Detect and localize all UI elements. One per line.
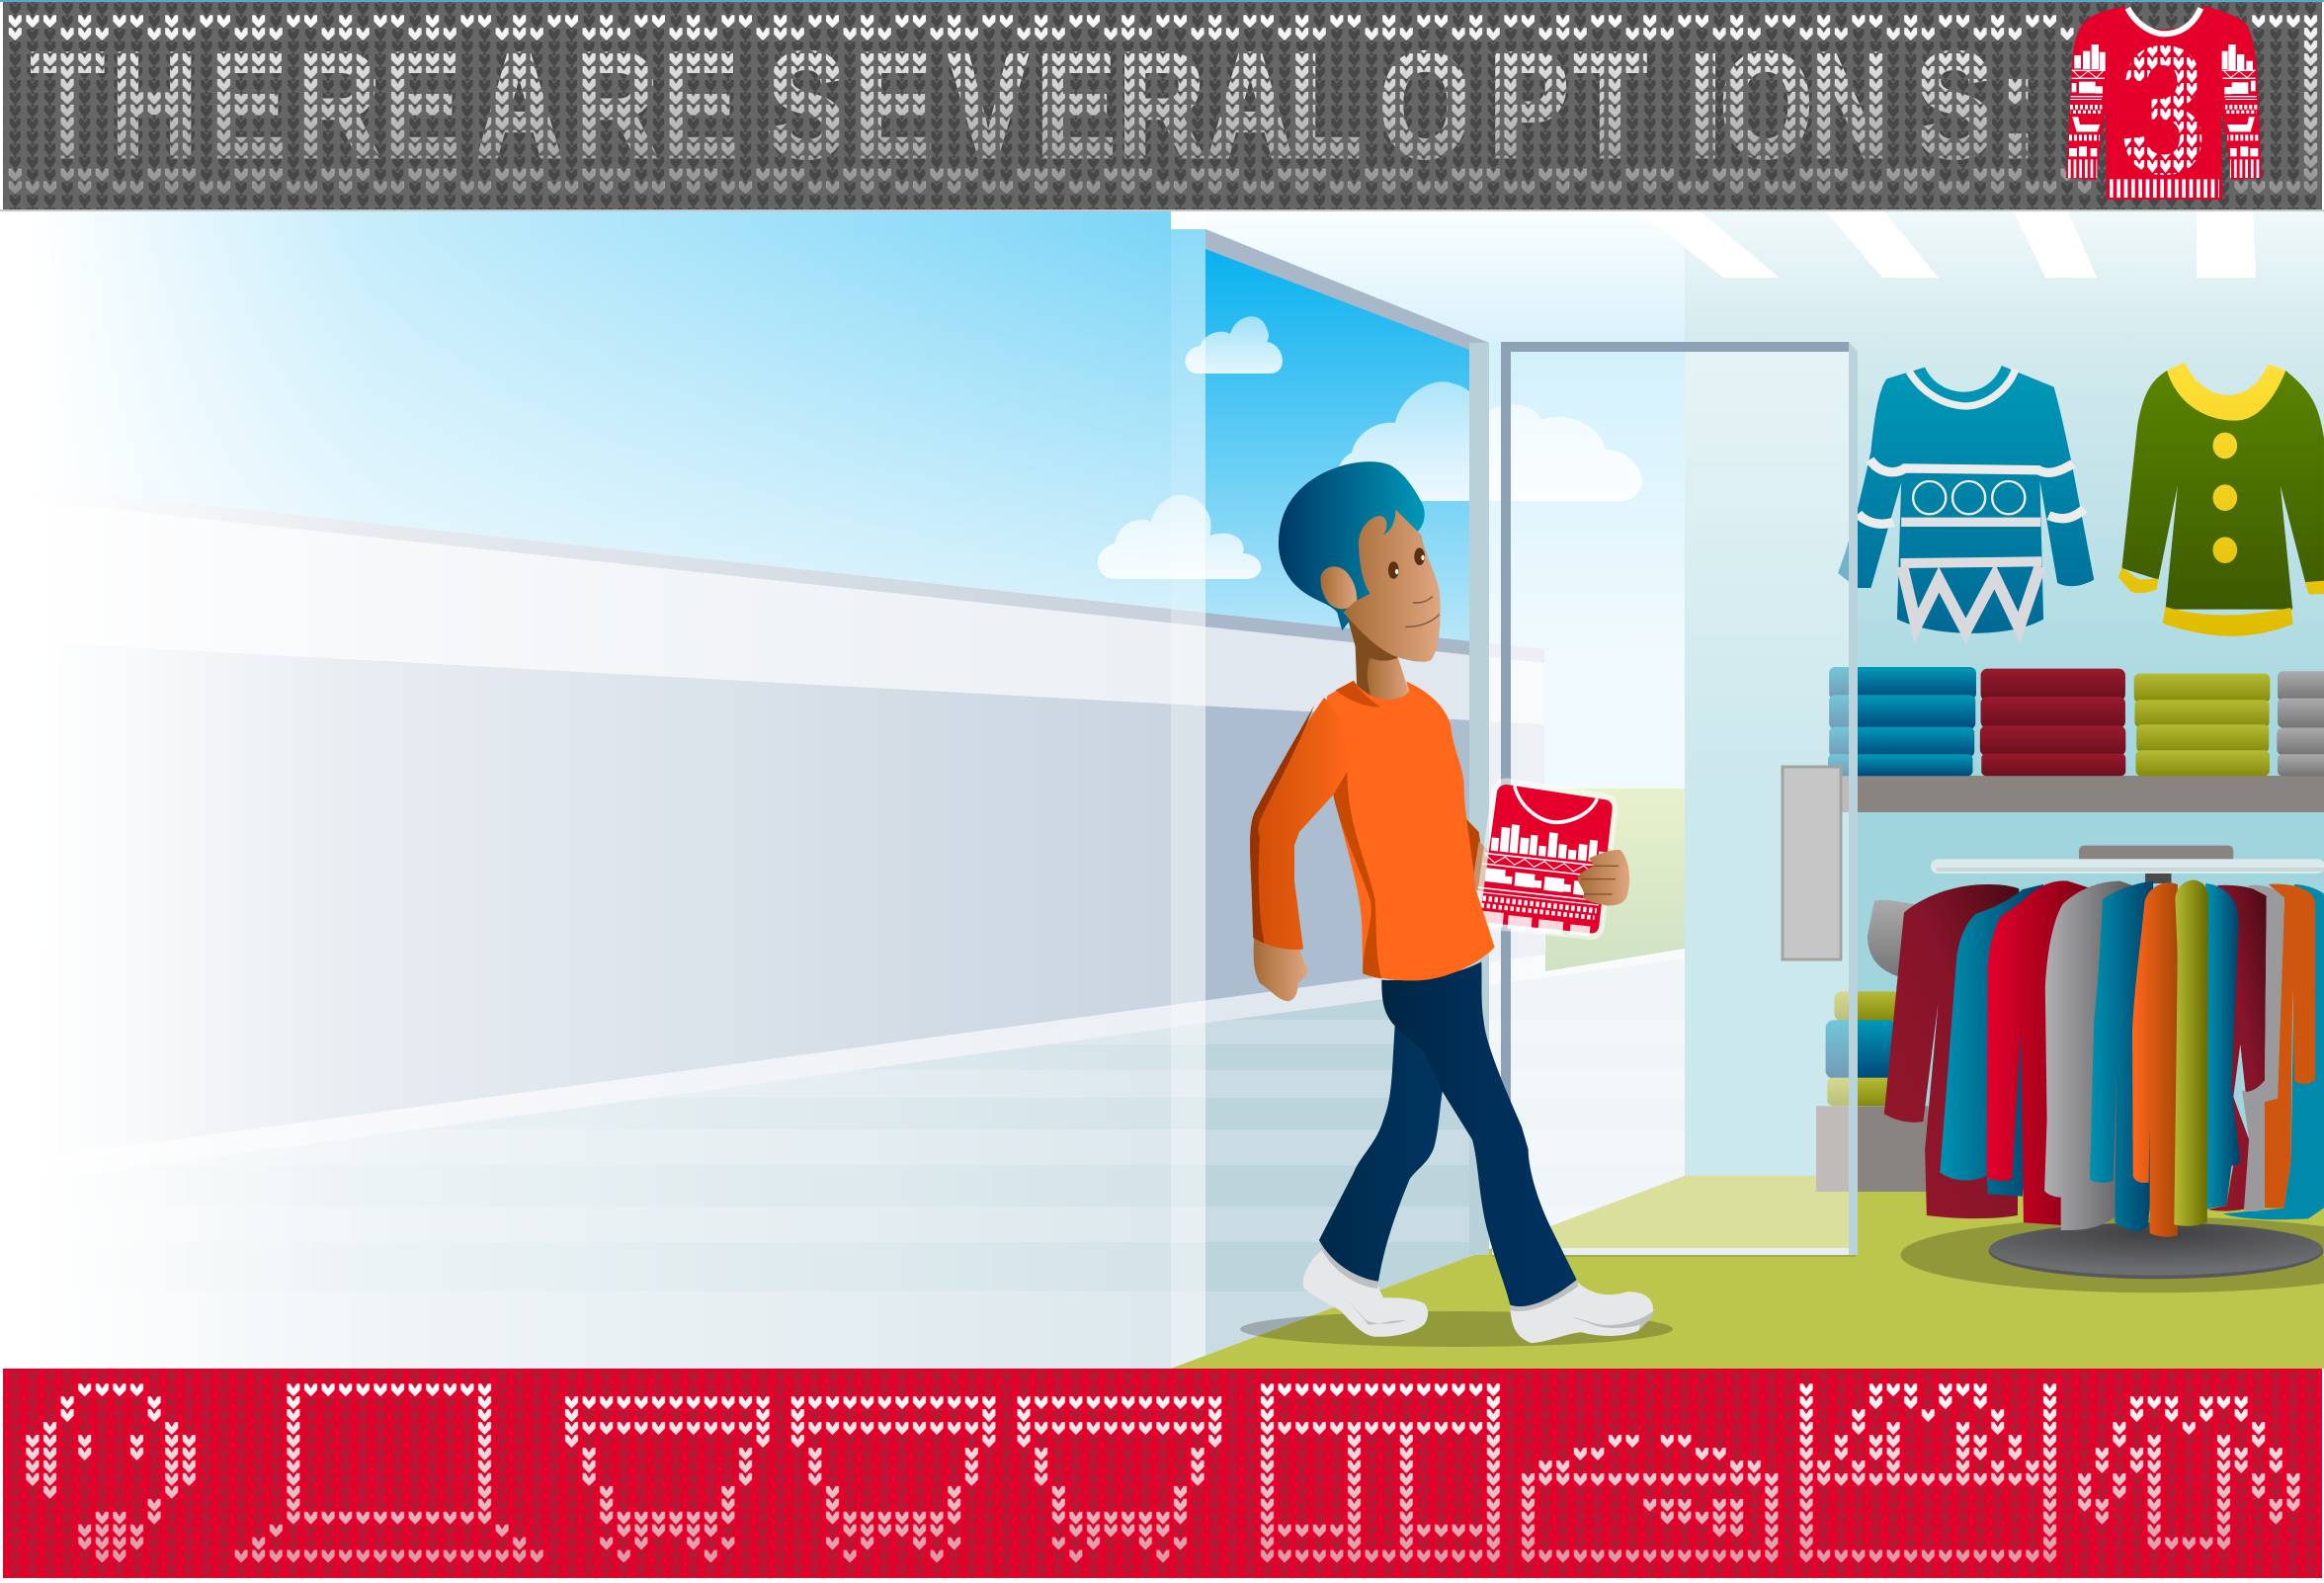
glass edge pillar xyxy=(1171,209,1205,1369)
rack rail xyxy=(1931,859,2324,874)
right shoe xyxy=(1510,1282,1653,1343)
stack: olive xyxy=(2134,674,2270,776)
sidewalk stripes xyxy=(0,949,1685,1369)
cloud: upper xyxy=(1186,316,1283,374)
left hand xyxy=(1254,927,1308,1001)
sweater collar xyxy=(2127,8,2200,34)
back leg xyxy=(1319,1026,1443,1282)
upper body xyxy=(1250,461,1629,1001)
left shoe crease xyxy=(1332,1291,1406,1325)
far forearm xyxy=(1471,841,1489,892)
hair xyxy=(1279,461,1425,630)
icon: shopping cart 3 xyxy=(1015,1396,1223,1563)
folded sweaters on shelf xyxy=(1828,667,2324,776)
front leg xyxy=(1381,961,1577,1306)
red sweater with number 3 xyxy=(2066,5,2262,212)
garment: teal far right xyxy=(2223,884,2324,1219)
cloud: large xyxy=(1337,381,1642,501)
red sweater card xyxy=(1474,785,1613,939)
person walking xyxy=(1240,461,1673,1347)
knit decoration rows and heading xyxy=(6,15,2319,195)
rack base xyxy=(1989,1223,2323,1279)
garment: orange xyxy=(2132,882,2178,1237)
door opening top frame xyxy=(1205,229,1489,350)
ceiling lights xyxy=(1636,209,2256,278)
low stack xyxy=(1826,991,1900,1106)
garment: gray right xyxy=(2242,885,2284,1211)
neck light side xyxy=(1368,658,1411,706)
low bench xyxy=(1816,1106,1929,1192)
sweater hem xyxy=(2110,161,2219,216)
torso side shadow xyxy=(1333,772,1381,978)
rack post xyxy=(2145,874,2171,883)
legs and shoes xyxy=(1303,961,1653,1343)
arm dark edge xyxy=(1250,706,1314,944)
door pillar xyxy=(1469,343,1489,1255)
left sleeve motifs xyxy=(2068,44,2106,169)
clouds xyxy=(1098,316,1642,579)
rack base top xyxy=(1989,1222,2323,1276)
window sky haze xyxy=(0,209,1171,664)
icon: shopping cart 2 xyxy=(788,1396,998,1563)
top knit banner xyxy=(0,0,2324,212)
icon: storefront xyxy=(1259,1383,1502,1563)
stack: teal xyxy=(1828,667,1976,776)
garment: teal inner xyxy=(2205,883,2240,1208)
far arm xyxy=(1464,817,1480,888)
floor shadow xyxy=(1240,1311,1673,1347)
right shoe cuff shade xyxy=(1510,1280,1578,1311)
cloud: lower xyxy=(1098,495,1261,579)
shopfront window glass xyxy=(0,209,1171,1369)
green cardigan on wall xyxy=(2118,363,2324,636)
near arm xyxy=(1250,698,1347,950)
sweater body xyxy=(2066,5,2262,200)
face xyxy=(1343,510,1441,662)
card knit motifs xyxy=(1474,821,1608,939)
title: THERE ARE SEVERAL OPTIONS: xyxy=(32,22,2037,188)
icon: head xyxy=(24,1383,198,1563)
right hand xyxy=(1578,850,1629,905)
garment: gray back xyxy=(1868,900,1918,978)
building wall xyxy=(0,483,1685,1186)
garment: orange right xyxy=(2265,884,2315,1208)
collar fold xyxy=(1336,681,1380,708)
icon: garment in frame xyxy=(1797,1383,2058,1563)
teal sweater on wall xyxy=(1838,366,2094,633)
garment: teal xyxy=(1940,884,2043,1197)
banner knit background xyxy=(3,1369,2322,1578)
garment: red xyxy=(1987,880,2089,1225)
left shoe cuff shade xyxy=(1319,1240,1378,1289)
sky xyxy=(0,209,1685,1000)
ear xyxy=(1321,566,1357,609)
icon: folded garment box xyxy=(1520,1435,1781,1563)
door handle xyxy=(1783,767,1841,959)
torso xyxy=(1327,681,1495,980)
door glass tint xyxy=(1489,343,1849,1249)
door frame xyxy=(1492,342,1858,1257)
garment: burgundy right xyxy=(2207,885,2267,1211)
floor corner in front of glass xyxy=(1171,1356,1206,1369)
stack: burgundy xyxy=(1980,669,2125,776)
landscape outside xyxy=(1545,789,1685,971)
clothing rack and low stacks xyxy=(1816,846,2324,1292)
icon: sweater xyxy=(2076,1396,2302,1550)
bottom knit banner xyxy=(3,1369,2322,1578)
right sleeve motifs xyxy=(2222,44,2259,169)
floor xyxy=(1171,1176,2324,1369)
card collar xyxy=(1515,786,1598,822)
shelf xyxy=(1784,776,2324,812)
knit icons xyxy=(24,1383,2302,1563)
garment: olive xyxy=(2174,880,2208,1226)
left shoe xyxy=(1303,1250,1428,1337)
nose and mouth xyxy=(1406,597,1439,626)
right shoe crease xyxy=(1571,1311,1653,1331)
garment: teal center xyxy=(2090,881,2155,1231)
rack floor shadow xyxy=(1900,1217,2324,1292)
store scene xyxy=(0,209,2324,1369)
garment: burgundy xyxy=(1884,884,2019,1218)
eyes xyxy=(1388,547,1425,579)
rack bracket xyxy=(2079,846,2233,859)
number 3: 3 xyxy=(2120,9,2207,212)
icon: laptop xyxy=(232,1383,545,1563)
icon: shopping cart 1 xyxy=(563,1396,772,1563)
top edge line xyxy=(0,0,2324,2)
stack: gray xyxy=(2277,671,2324,776)
soffit above the door xyxy=(1171,209,1685,343)
garment: gray xyxy=(2044,881,2134,1230)
decoration rows xyxy=(6,15,2319,195)
banner knit background xyxy=(0,2,2324,211)
shop back wall xyxy=(1685,209,2324,1178)
neck xyxy=(1347,617,1411,708)
